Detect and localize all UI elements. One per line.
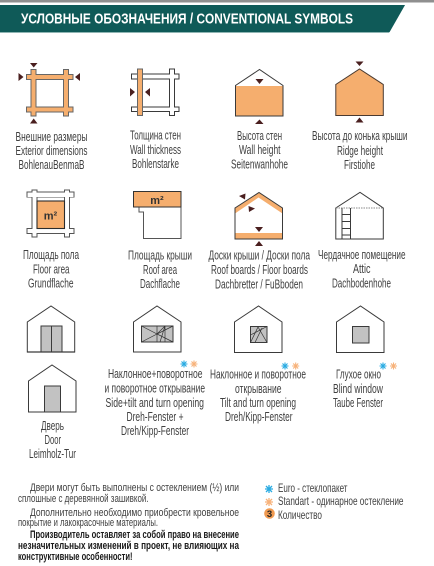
note: manufacturer disclaimer: Производитель оставляет за собой право на внесение	[30, 529, 239, 541]
legend: standard star	[265, 498, 273, 506]
text: ridge height	[312, 129, 408, 172]
note: extra materials: покрытие и лакокрасочные материалы.	[18, 517, 158, 529]
text: blind window: Taube Fenster	[333, 396, 383, 410]
text: side and tilt-turn opening	[104, 367, 205, 438]
legend: quantity label: Количество	[278, 508, 322, 522]
ladder	[342, 208, 350, 239]
text: blind window	[333, 368, 384, 410]
text: blind window: Blind window	[333, 382, 384, 396]
legend: euro star	[265, 485, 273, 493]
legend: euro label: Euro - стеклопакет	[278, 481, 348, 495]
text: tilt and turn opening: открывание	[235, 382, 282, 396]
text: wall height: Высота стен	[237, 129, 282, 143]
icon: ridge height	[336, 62, 383, 122]
icon: blind window house	[336, 306, 384, 352]
text: tilt and turn opening: Tilt and turn opening	[220, 396, 296, 410]
icon: wall thickness	[130, 69, 179, 116]
icon: roof and floor boards	[235, 192, 282, 246]
text: roof area: Площадь крыши	[128, 248, 192, 262]
text: door: Leimholz-Tur	[29, 447, 76, 461]
icon: attic	[336, 192, 383, 239]
label: m²: m²	[150, 195, 164, 207]
text: exterior dimensions: Внешние размеры	[16, 130, 88, 144]
stars: side and tilt-turn glazing	[180, 360, 198, 368]
icon: side and tilt-turn window house	[134, 306, 181, 352]
text: wall thickness	[130, 128, 181, 171]
text: side and tilt-turn opening: и поворотное открывание	[104, 382, 205, 396]
text: tilt and turn opening	[210, 368, 306, 424]
text: floor area	[23, 248, 79, 290]
text: roof and floor boards: Dachbretter / FuBboden	[215, 278, 303, 292]
legend	[264, 481, 404, 522]
text: blind window: Глухое окно	[336, 368, 381, 382]
text: wall height: Wall height	[239, 143, 281, 157]
text: floor area: Площадь пола	[23, 248, 79, 262]
icon: double door house	[27, 306, 75, 352]
text: roof area: Roof area	[143, 263, 177, 277]
icon: tilt-turn window house	[234, 306, 282, 352]
header banner	[0, 5, 405, 33]
icon: floor area	[27, 190, 74, 237]
text: roof area: Dachflache	[140, 277, 180, 291]
text: attic: Dachbodenhohe	[332, 276, 391, 290]
note: manufacturer disclaimer: незначительных изменений в проект, не влияющих на	[18, 540, 240, 552]
text: wall height: Seitenwanhohe	[231, 158, 288, 172]
note: manufacturer disclaimer	[18, 529, 240, 563]
icon: exterior dimensions	[18, 63, 80, 124]
note: doors glazing: сплошные с деревянной зашивкой.	[18, 493, 148, 505]
text: door: Door	[44, 433, 61, 447]
text: tilt and turn opening: Dreh/Kipp-Fenster	[225, 410, 292, 424]
text: roof area	[128, 248, 192, 291]
text: side and tilt-turn opening: Наклонное+поворотное	[108, 367, 203, 381]
note: extra materials	[18, 507, 239, 529]
icon: door house	[28, 365, 76, 412]
text: tilt and turn opening: Наклонное и поворотное	[210, 368, 306, 382]
text: side and tilt-turn opening: Dreh-Fenster +	[126, 410, 184, 424]
text: exterior dimensions	[16, 130, 88, 172]
text: side and tilt-turn opening: Dreh/Kipp-Fenster	[121, 424, 189, 438]
stars: tilt-turn glazing	[282, 362, 299, 370]
text: roof and floor boards: Roof boards / Floor boards	[211, 263, 308, 277]
text: side and tilt-turn opening: Side+tilt and turn opening	[106, 396, 204, 410]
note: doors glazing: Двери могут быть выполнены с остеклением (½) или	[30, 482, 239, 494]
title: УСЛОВНЫЕ ОБОЗНАЧЕНИЯ / CONVENTIONAL SYMBOLS	[21, 12, 353, 28]
text: wall height	[231, 129, 288, 172]
text: ridge height: Firstiohe	[344, 158, 375, 172]
text: floor area: Grundflache	[28, 276, 74, 290]
text: roof and floor boards	[208, 248, 310, 292]
text: exterior dimensions: BohlenauBenmaB	[18, 158, 84, 172]
text: exterior dimensions: Exterior dimensions	[16, 144, 88, 158]
text: door: Дверь	[41, 419, 64, 433]
top strip	[0, 0, 434, 2]
label: m²: m²	[44, 210, 58, 222]
stars: blind window glazing	[380, 362, 397, 370]
icon: roof area	[134, 192, 181, 238]
text: roof and floor boards: Доски крыши / Доски пола	[208, 248, 310, 262]
text: attic	[318, 248, 406, 290]
text: door	[29, 419, 76, 461]
text: wall thickness: Bohlenstarke	[132, 157, 179, 171]
note: manufacturer disclaimer: конструктивные особенности!	[18, 551, 132, 563]
text: floor area: Floor area	[33, 262, 70, 276]
text: wall thickness: Wall thickness	[130, 143, 181, 157]
note: extra materials: Дополнительно необходимо приобрести кровельное	[30, 507, 239, 519]
icon: wall height	[236, 70, 283, 124]
legend: quantity badge: 3	[267, 509, 272, 520]
text: wall thickness: Толщина стен	[130, 128, 181, 142]
text: ridge height: Ridge height	[337, 144, 383, 158]
note: doors glazing	[18, 482, 239, 505]
text: attic: Attic	[353, 262, 370, 276]
